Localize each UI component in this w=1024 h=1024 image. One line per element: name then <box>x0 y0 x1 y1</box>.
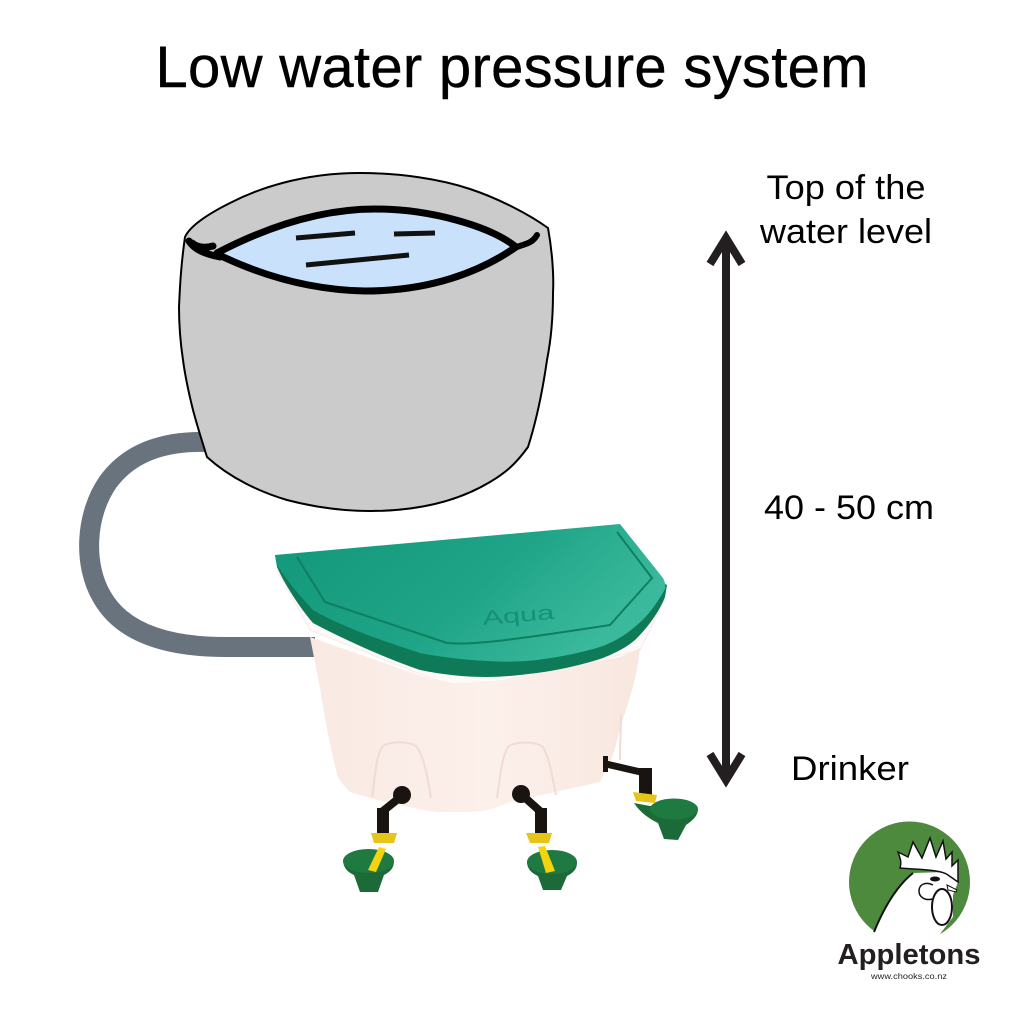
rooster comb <box>898 838 958 882</box>
lid logo: Aqua <box>482 602 556 630</box>
drinker white rim <box>277 570 666 684</box>
drinker <box>275 524 698 892</box>
rooster ear <box>919 883 933 900</box>
logo circle <box>849 822 970 942</box>
lid edge <box>275 555 667 677</box>
label: drinker: Drinker <box>791 750 909 788</box>
nipple cup right <box>603 756 698 840</box>
lid inset <box>297 532 652 644</box>
rooster beak <box>947 885 957 892</box>
label: height: 40 - 50 cm <box>764 489 934 527</box>
water tank <box>179 173 553 511</box>
tank rim <box>189 209 537 291</box>
rooster eye <box>930 876 940 882</box>
rooster neck <box>874 872 958 950</box>
rooster wattle <box>932 889 952 925</box>
logo url: www.chooks.co.nz <box>870 971 947 981</box>
nipple cup left <box>343 786 411 892</box>
nipple cup centre <box>512 785 577 890</box>
label: top of the water level: water level <box>759 213 932 251</box>
title: Low water pressure system <box>156 35 868 100</box>
logo name: Appletons <box>838 939 980 971</box>
water surface <box>217 209 516 292</box>
double arrow <box>710 238 742 780</box>
Appletons logo <box>838 822 980 981</box>
hose <box>89 442 315 647</box>
body arches <box>372 714 621 798</box>
drinker body <box>310 637 640 812</box>
water ripples <box>296 233 435 265</box>
tank body <box>179 173 553 511</box>
label: top of the water level <box>759 169 932 251</box>
lid top <box>275 524 665 662</box>
label: top of the water level: Top of the <box>766 169 926 207</box>
